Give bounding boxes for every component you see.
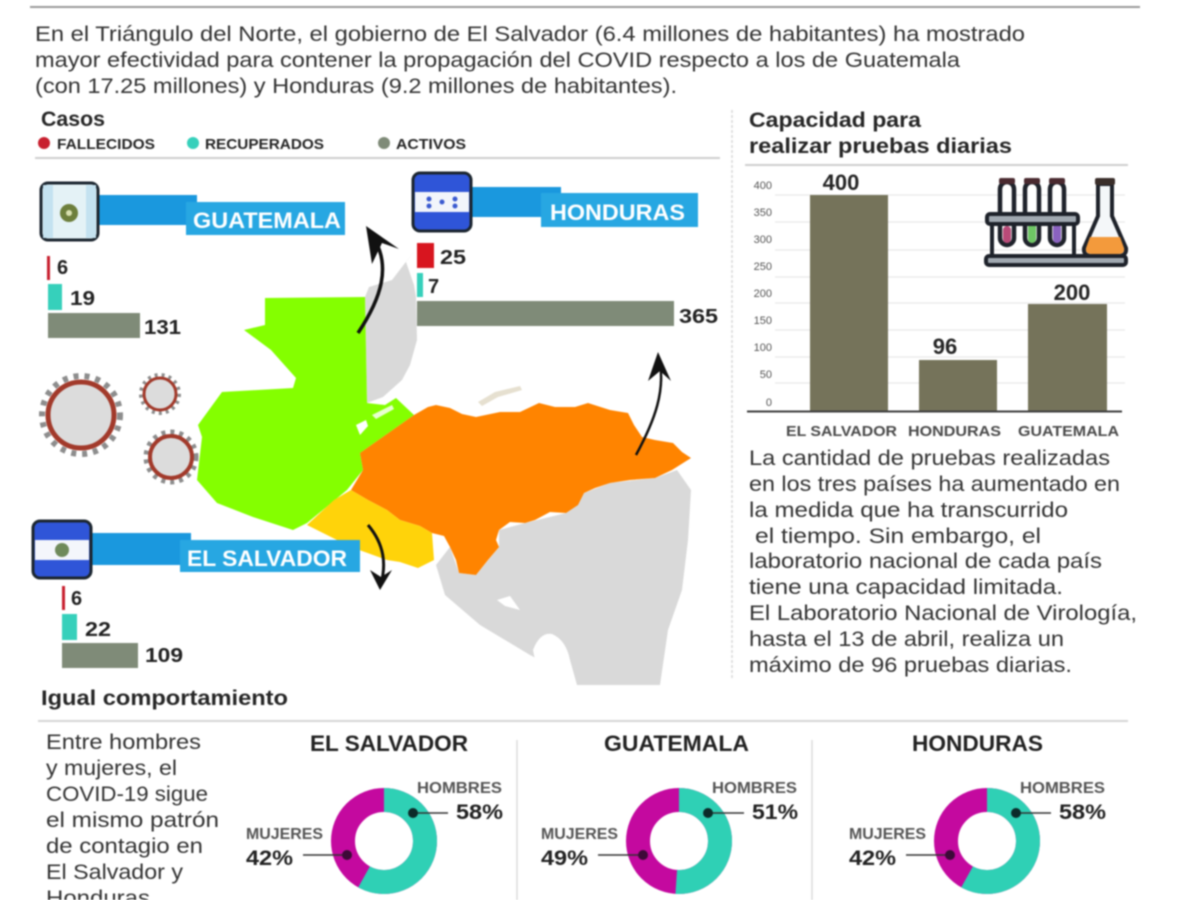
map: El Salvador: [307, 490, 434, 568]
intro paragraph: En el Triángulo del Norte, el gobierno de El Salvador (6.4 millones de habitantes) ha mostrado: [35, 23, 1025, 46]
icon: bandera de Honduras: [413, 173, 471, 231]
icon: tubos de ensayo y matraz: [986, 178, 1126, 265]
icon: virus pequeño: [141, 375, 179, 413]
legend: FALLECIDOS: [57, 136, 155, 153]
bars: Honduras: 25: [440, 247, 466, 269]
banner: El Salvador: EL SALVADOR: [187, 546, 347, 571]
icon: virus mediano: [146, 432, 196, 482]
heading: capacidad para pruebas: [749, 109, 1012, 158]
map: Guatemala: [197, 297, 414, 530]
banner: Guatemala: [41, 183, 345, 240]
bar chart: capacidad diaria: 150: [754, 315, 772, 327]
bar chart: capacidad diaria: 96: [933, 334, 957, 359]
intro paragraph: (con 17.25 millones) y Honduras (9.2 millones de habitantes).: [35, 75, 677, 98]
donut: Honduras: [849, 731, 1106, 882]
text block: comportamiento: Entre hombres: [46, 731, 201, 754]
bars: Honduras: [417, 243, 718, 328]
text block: comportamiento: y mujeres, el: [46, 757, 177, 780]
donut: El Salvador: MUJERES: [246, 826, 323, 843]
legend: [38, 136, 466, 153]
text block: pruebas: en los tres países ha aumentado en: [749, 473, 1120, 496]
text block: pruebas: laboratorio nacional de cada país: [749, 550, 1102, 573]
heading: casos: Casos: [41, 108, 105, 131]
donut: El Salvador: HOMBRES: [417, 780, 502, 797]
bar chart: capacidad diaria: 100: [754, 342, 772, 354]
banner: El Salvador: [33, 521, 360, 578]
donut: El Salvador: 58%: [456, 801, 503, 824]
banner: Honduras: [413, 173, 698, 231]
text block: pruebas: tiene una capacidad limitada.: [749, 576, 1063, 599]
bars: El Salvador: 109: [145, 645, 183, 667]
donut: Guatemala: GUATEMALA: [604, 731, 749, 756]
legend: ACTIVOS: [396, 136, 466, 153]
heading: capacidad para pruebas: Capacidad para: [749, 109, 921, 132]
bars: Honduras: 7: [428, 276, 439, 298]
arrow: Honduras: [636, 352, 671, 455]
map: Nicaragua: [436, 470, 691, 685]
bars: Guatemala: 131: [144, 317, 181, 339]
heading: igual comportamiento: Igual comportamiento: [41, 687, 288, 710]
heading: capacidad para pruebas: realizar pruebas diarias: [749, 135, 1012, 158]
bars: Guatemala: 6: [57, 257, 68, 279]
text block: pruebas: máximo de 96 pruebas diarias.: [749, 654, 1072, 677]
intro paragraph: mayor efectividad para contener la propagación del COVID respecto a los de Guatemala: [35, 49, 960, 72]
banner: Guatemala: GUATEMALA: [193, 208, 341, 233]
donut: Honduras: HONDURAS: [912, 731, 1043, 756]
text block: pruebas: El Laboratorio Nacional de Virología,: [749, 602, 1137, 625]
banner: Honduras: HONDURAS: [550, 200, 685, 225]
text block: comportamiento: de contagio en: [46, 835, 203, 858]
bars: Honduras: 365: [679, 306, 718, 328]
icon: bandera de El Salvador: [33, 521, 91, 578]
text block: comportamiento: el mismo patrón: [46, 809, 219, 832]
donut: El Salvador: EL SALVADOR: [310, 731, 468, 756]
bar chart: capacidad diaria: 300: [754, 234, 772, 246]
text block: pruebas: La cantidad de pruebas realizadas: [749, 447, 1110, 470]
text block: pruebas: hasta el 13 de abril, realiza un: [749, 628, 1064, 651]
bar chart: capacidad diaria: 50: [760, 369, 772, 381]
donut: Guatemala: MUJERES: [541, 826, 618, 843]
icon: bandera de Guatemala: [41, 183, 98, 240]
donut: Guatemala: [541, 731, 798, 882]
donut: Guatemala: 49%: [541, 847, 588, 870]
bar chart: capacidad diaria: 200: [754, 288, 772, 300]
legend: RECUPERADOS: [205, 136, 324, 153]
donut: Honduras: HOMBRES: [1020, 780, 1105, 797]
text block: pruebas: [749, 447, 1137, 677]
map: Belice: [365, 250, 417, 403]
bars: El Salvador: 22: [85, 619, 111, 641]
bar chart: capacidad diaria: 250: [754, 261, 772, 273]
map: [197, 250, 691, 685]
bar chart: capacidad diaria: EL SALVADOR: [786, 423, 897, 440]
donut: Honduras: MUJERES: [849, 826, 926, 843]
donut: El Salvador: 42%: [246, 847, 293, 870]
bar chart: capacidad diaria: 0: [766, 397, 772, 409]
text block: comportamiento: El Salvador y: [46, 861, 184, 884]
bars: Guatemala: [47, 256, 181, 339]
text block: pruebas: el tiempo. Sin embargo, el: [755, 525, 1041, 548]
icon: virus grande: [42, 376, 120, 454]
bar chart: capacidad diaria: 350: [754, 207, 772, 219]
bar chart: capacidad diaria: 400: [754, 180, 772, 192]
donut: El Salvador: [246, 731, 503, 882]
bar chart: capacidad diaria: 400: [823, 170, 859, 195]
donut: Guatemala: HOMBRES: [712, 780, 797, 797]
bar chart: capacidad diaria: 200: [1054, 280, 1090, 305]
bar chart: capacidad diaria: [747, 170, 1125, 440]
bars: El Salvador: 6: [71, 588, 82, 610]
arrow: Guatemala: [358, 226, 399, 333]
donut: Honduras: 42%: [849, 847, 896, 870]
arrow: El Salvador: [368, 525, 392, 590]
bars: Guatemala: 19: [70, 288, 95, 310]
bar chart: capacidad diaria: GUATEMALA: [1018, 423, 1119, 440]
bar chart: capacidad diaria: HONDURAS: [908, 423, 1001, 440]
donut: Honduras: 58%: [1059, 801, 1106, 824]
text block: comportamiento: [46, 731, 219, 900]
intro paragraph: [35, 23, 1025, 98]
text block: pruebas: la medida que ha transcurrido: [749, 499, 1068, 522]
text block: comportamiento: COVID-19 sigue: [46, 783, 208, 806]
donut: Guatemala: 51%: [752, 801, 798, 824]
bars: El Salvador: [62, 586, 183, 668]
map: Honduras: [351, 403, 691, 575]
